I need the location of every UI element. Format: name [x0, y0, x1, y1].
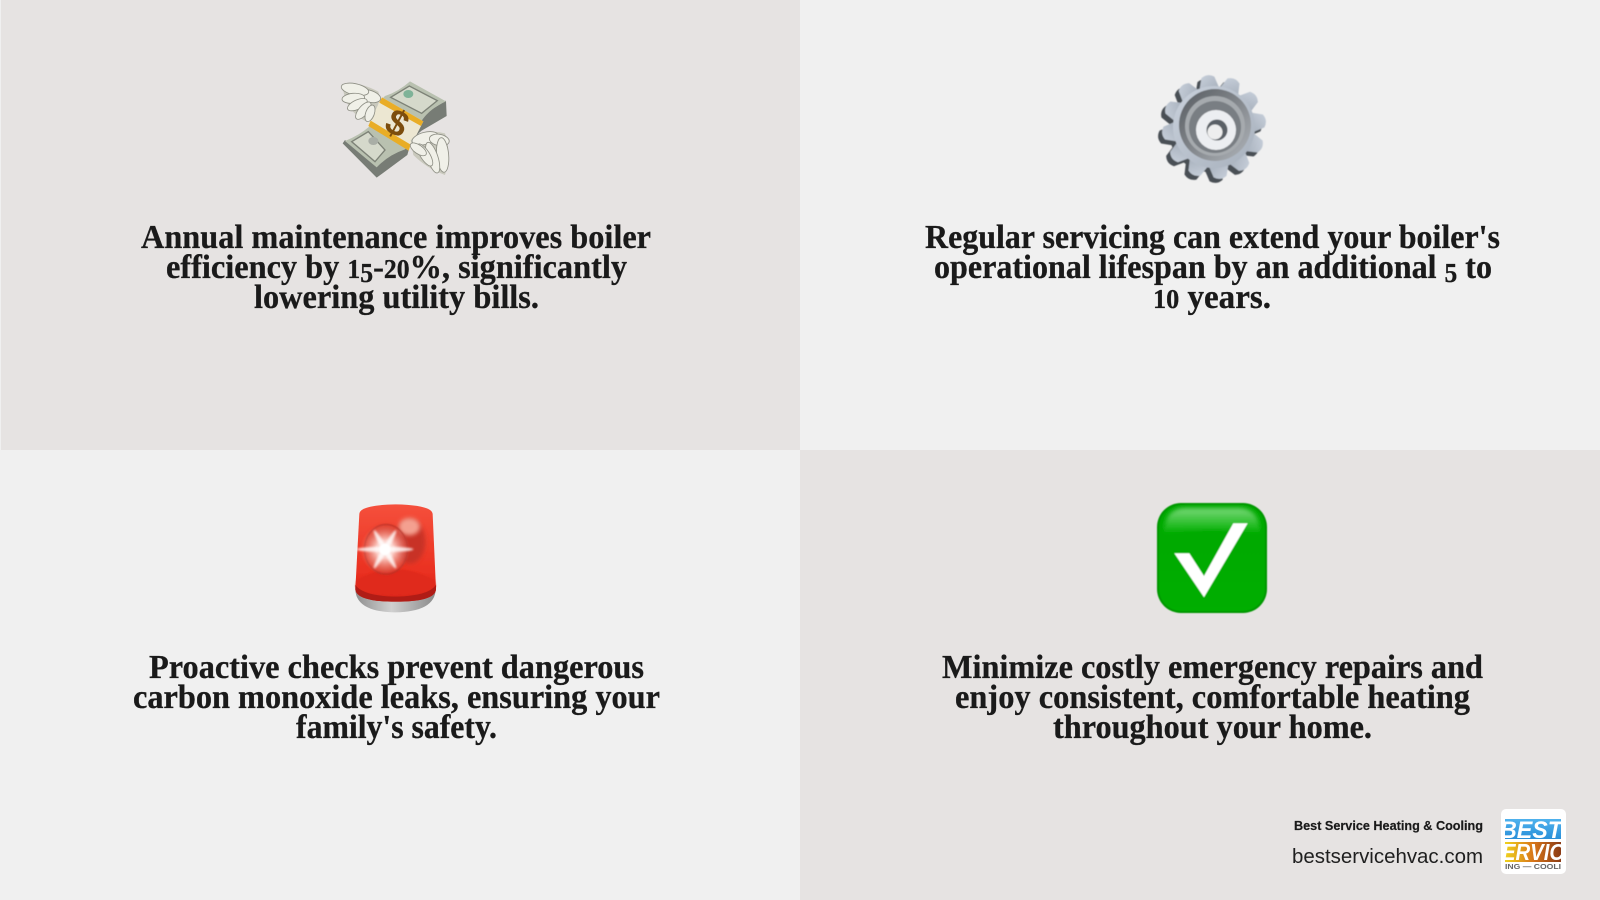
footer: company name: Best Service Heating & Cooling [1294, 818, 1483, 833]
text: efficiency statement: - [373, 249, 384, 286]
text: comfort statement: throughout your home. [1053, 709, 1372, 746]
text: efficiency statement: Annual maintenance improves boiler [141, 219, 651, 256]
text: efficiency statement: efficiency by 1 [166, 249, 361, 286]
logo [1500, 809, 1566, 874]
text: efficiency statement: 5 [360, 258, 373, 288]
wing: left [340, 81, 382, 123]
icon: money with wings [340, 81, 450, 178]
text: comfort statement: enjoy consistent, comfortable heating [955, 679, 1470, 716]
text: safety statement: carbon monoxide leaks, ensuring your [133, 679, 660, 716]
text: lifespan statement: Regular servicing can extend your boiler's [925, 219, 1500, 256]
dollar sign: $ [379, 100, 416, 146]
icon: rotating police light [355, 504, 436, 612]
text: efficiency statement: 20%, significantly [384, 249, 638, 286]
icon: gear [1157, 74, 1267, 184]
wing: right [408, 129, 450, 175]
panel: extended lifespan [800, 0, 1600, 450]
logo: ING — COOLI [1505, 864, 1561, 871]
logo: BEST [1500, 817, 1564, 844]
panel: carbon monoxide safety [0, 450, 800, 900]
text: lifespan statement [925, 219, 1500, 316]
text: lifespan statement: to [1457, 249, 1492, 286]
text: safety statement: Proactive checks prevent dangerous [149, 649, 644, 686]
text: safety statement: family's safety. [296, 709, 497, 746]
footer: website: bestservicehvac.com [1292, 846, 1483, 868]
text: comfort statement [942, 649, 1483, 746]
text: efficiency statement [141, 219, 651, 316]
panel: annual maintenance efficiency [0, 0, 800, 450]
text: comfort statement: Minimize costly emergency repairs and [942, 649, 1483, 686]
text: lifespan statement: 5 [1445, 258, 1457, 288]
panel: fewer repairs and comfort [800, 450, 1600, 900]
icon: green check mark [1157, 503, 1267, 613]
text: efficiency statement: lowering utility bills. [254, 279, 539, 316]
text: lifespan statement: operational lifespan by an additional [934, 249, 1467, 286]
text: lifespan statement: 10 years. [1153, 279, 1271, 316]
text: safety statement [133, 649, 660, 746]
